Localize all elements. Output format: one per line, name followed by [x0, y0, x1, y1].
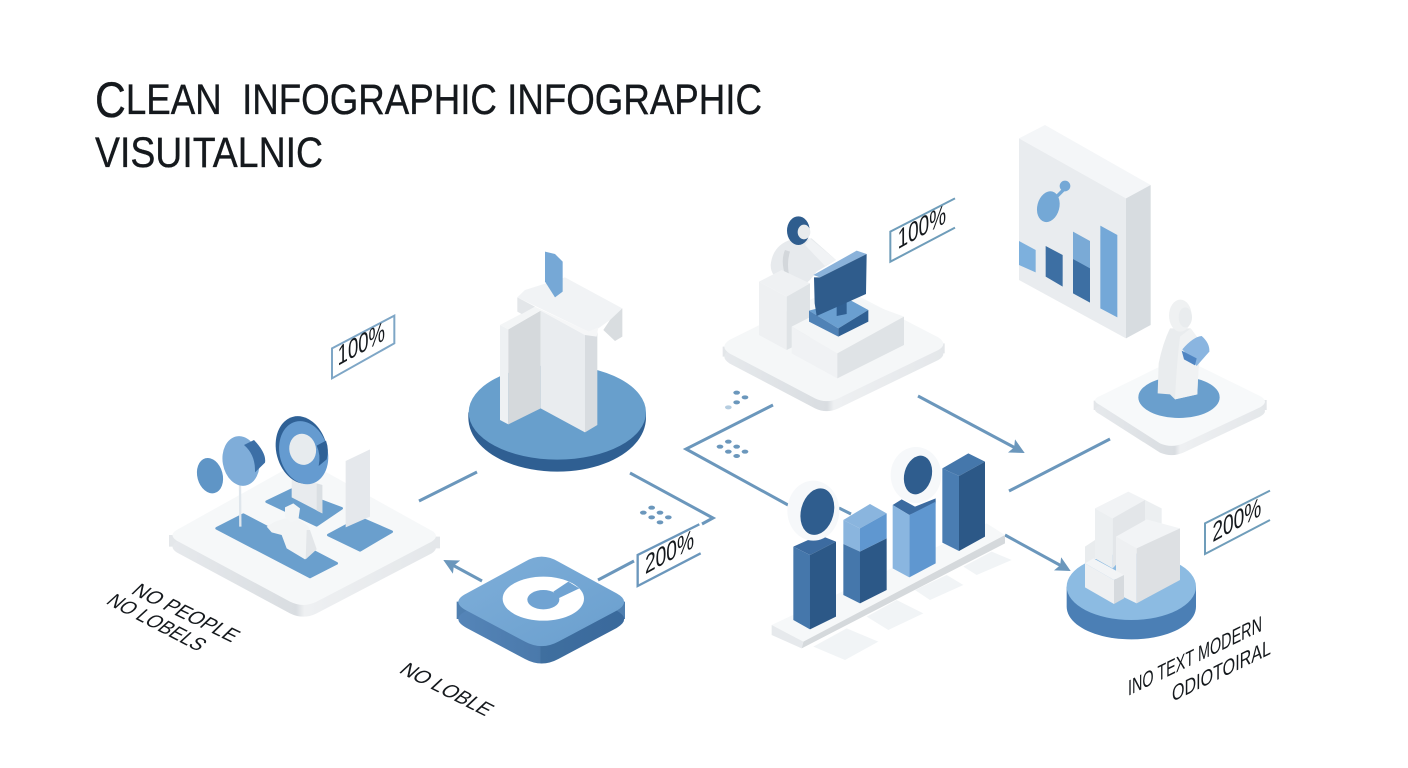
- rounded block with C icon: [457, 557, 625, 663]
- front block: [1116, 519, 1180, 603]
- title: LEAN INFOGRAPHIC INFOGRAPHIC: [126, 76, 762, 124]
- line: cylinder to 200% label: [630, 473, 713, 524]
- blue floor pads: [217, 490, 392, 577]
- icon: blocky figure: [267, 503, 317, 559]
- icon: monitor: [809, 251, 868, 337]
- label: 100%: 100%: [898, 198, 946, 256]
- panel: central cylinder tower: [457, 252, 748, 663]
- block body: [457, 602, 625, 619]
- icon: ring on stem: [268, 410, 335, 513]
- tower: [500, 307, 597, 432]
- disc on bar 3: [891, 447, 941, 503]
- roof: [517, 277, 622, 341]
- line: rounded block to label stub: [598, 561, 634, 580]
- line: behind bars: [839, 508, 851, 514]
- title: VISUITALNIC: [95, 129, 323, 177]
- bar chart on board: [1019, 226, 1117, 317]
- label: 200%: 200%: [1212, 492, 1261, 549]
- panel: 3D bar chart: [772, 447, 1012, 660]
- label: 100%: [890, 198, 955, 262]
- icon: upright panel: [346, 449, 370, 527]
- line: bars to person platform: [1009, 439, 1110, 491]
- floor shadows: [813, 552, 1012, 660]
- platform: [723, 288, 945, 411]
- dot cluster inside diamond: [717, 440, 748, 458]
- label: 200%: [1205, 491, 1270, 554]
- cylinder base: [468, 365, 646, 472]
- label: 200%: [638, 524, 701, 586]
- bar 2: [843, 504, 887, 603]
- line: diamond connector: [686, 405, 788, 505]
- bar 1: [793, 535, 836, 629]
- icon: balloon disc on post: [219, 433, 265, 527]
- board: [1019, 125, 1151, 338]
- bar 4: [942, 453, 985, 551]
- line: left platform to central cylinder: [419, 472, 477, 501]
- desk block back: [759, 270, 810, 350]
- arrow: computer platform to right: [918, 396, 1021, 451]
- icon: pie with pin: [1034, 181, 1070, 225]
- panel: left platform scene: [169, 316, 440, 617]
- figure: [1158, 300, 1202, 399]
- small block: [1085, 558, 1124, 604]
- label: 100%: [332, 316, 394, 378]
- back block: [1085, 492, 1162, 568]
- caption: no text modern: INO TEXT MODERN: [1128, 611, 1262, 701]
- icon: small floating disc: [193, 455, 227, 496]
- arrow: rounded block to left platform: [447, 562, 482, 581]
- cylinder: [1067, 553, 1196, 639]
- label: 200%: 200%: [645, 524, 694, 581]
- icon: bag: [1182, 336, 1209, 366]
- connector lines and arrows: [419, 396, 1110, 581]
- desk block front: [792, 297, 904, 378]
- panel: city block cylinder: [1067, 491, 1270, 639]
- caption: no people: NO PEOPLE: [126, 580, 245, 646]
- person: [771, 216, 836, 288]
- caption: odiotoiral: ODIOTOIRAL: [1172, 634, 1271, 707]
- platform base: [169, 462, 440, 617]
- icon: C gauge: [503, 577, 584, 621]
- small platform: [1094, 359, 1267, 455]
- dot cluster above diamond: [725, 391, 748, 409]
- bar 3: [893, 498, 936, 577]
- panel: computer workstation: [723, 198, 955, 411]
- disc on bar 1: [787, 481, 839, 541]
- arrow: bars to city cylinder: [1005, 535, 1067, 569]
- title: [95, 72, 762, 177]
- title: C: [95, 72, 126, 128]
- dot cluster: [640, 506, 672, 524]
- label: 100%: 100%: [338, 316, 385, 373]
- base slab: [772, 523, 1005, 648]
- icon: blue flag: [545, 252, 563, 297]
- caption: no loble: NO LOBLE: [394, 659, 499, 720]
- caption: no lobels: NO LOBELS: [101, 590, 212, 655]
- panel: wall chart board and person: [1019, 125, 1267, 455]
